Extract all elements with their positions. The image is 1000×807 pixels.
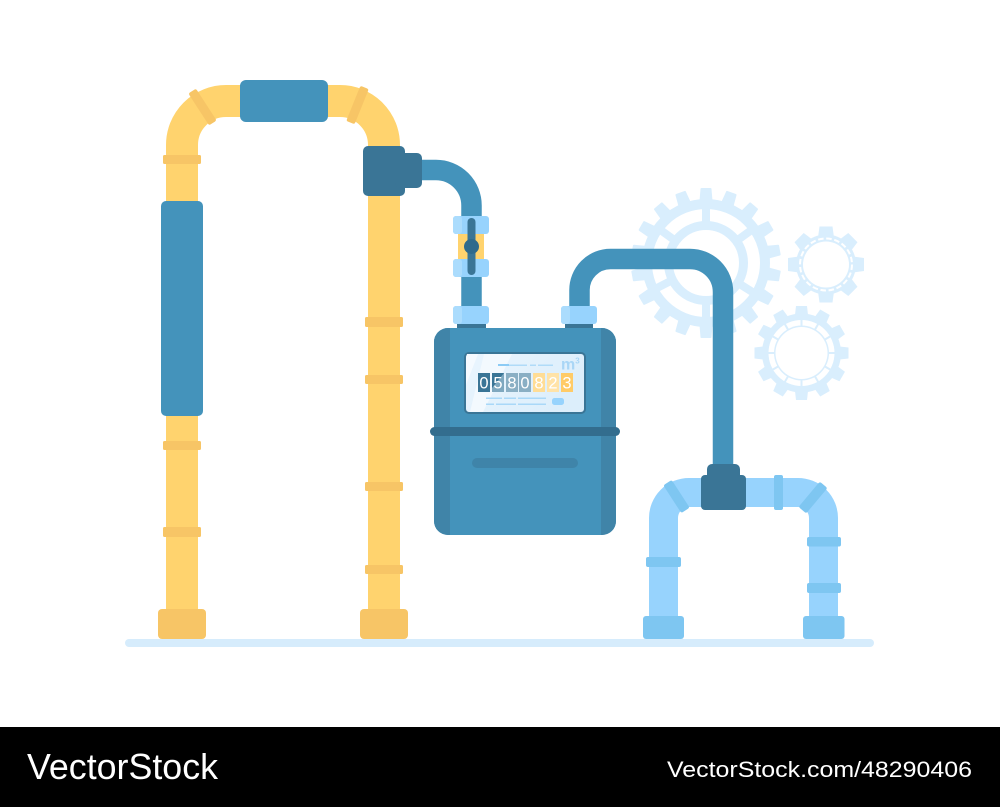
footer bar [0, 727, 1000, 807]
yellow pipe base right [360, 609, 408, 639]
left blue sleeve [161, 201, 203, 416]
valve [453, 216, 489, 277]
digits: 0 [520, 374, 530, 392]
digits: 3 [562, 374, 572, 392]
display top lines [498, 364, 553, 366]
meter inlet fitting [453, 306, 489, 330]
lower dark connector [701, 464, 746, 510]
blue pipe from meter to lower pipe [580, 259, 723, 470]
footer image id text: VectorStock.com/48290406 [667, 757, 972, 782]
light blue pipe [643, 475, 844, 639]
blue pipe from connector to valve and meter [420, 170, 472, 330]
light blue base left [643, 616, 684, 639]
display bottom lines [486, 398, 564, 405]
footer logo text: VectorStock [27, 746, 219, 787]
digits: 8 [507, 374, 517, 392]
large gear [632, 189, 780, 337]
ground line [125, 639, 874, 647]
yellow pipe collars [163, 86, 403, 574]
top blue sleeve [240, 80, 328, 122]
light blue base right [803, 616, 844, 639]
light blue pipe collars [646, 475, 841, 593]
digits: 8 [534, 374, 544, 392]
digits: 0 [479, 374, 489, 392]
digit cells [478, 373, 573, 392]
unit label: m [561, 356, 575, 374]
upper right gear [788, 226, 864, 302]
dark connector [363, 146, 422, 196]
digits: 2 [548, 374, 558, 392]
meter outlet fitting [561, 306, 597, 330]
digits [479, 374, 572, 392]
gas meter [430, 328, 620, 535]
unit label: 3 [575, 356, 580, 366]
meter display [465, 353, 585, 413]
yellow pipe [158, 86, 408, 639]
yellow pipe base left [158, 609, 206, 639]
lower right gear [754, 306, 848, 400]
digits: 5 [493, 374, 503, 392]
